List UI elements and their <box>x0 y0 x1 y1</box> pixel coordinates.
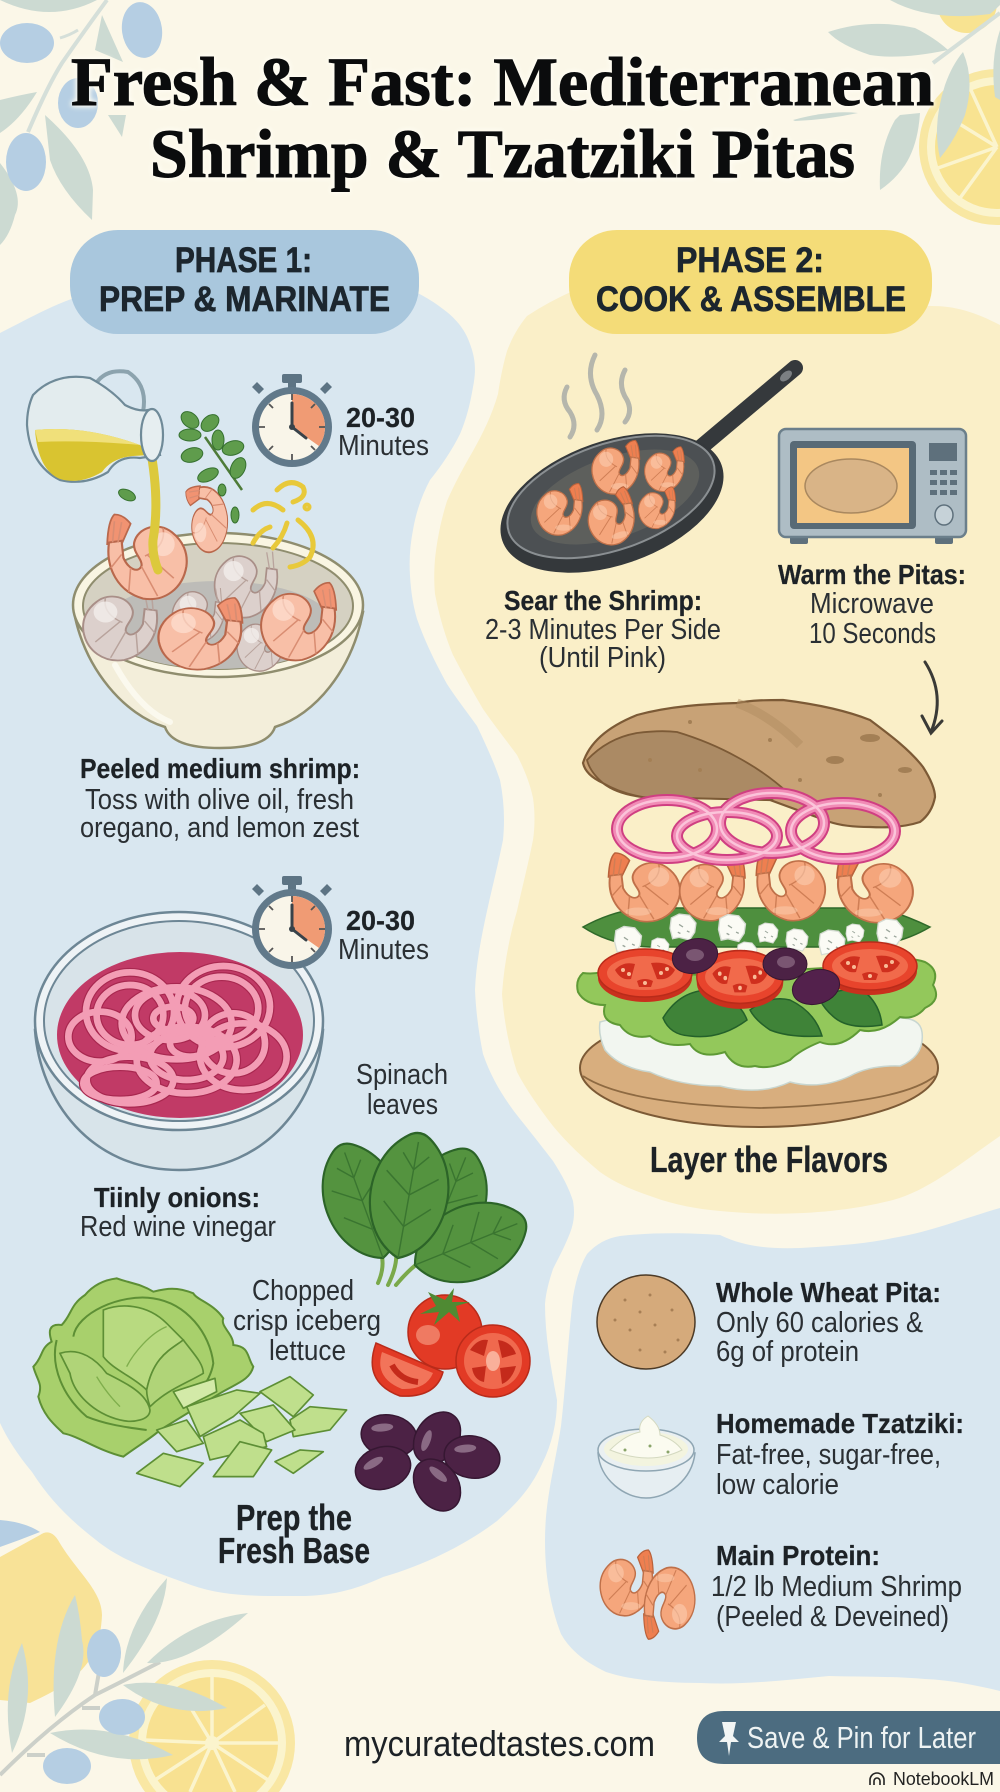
text: main protein: Main Protein: <box>716 1540 880 1571</box>
feta crumbles <box>614 914 903 962</box>
olive slices <box>668 934 844 1010</box>
text: shrimp marinade <box>80 753 360 844</box>
text: prep the fresh base <box>218 1497 370 1571</box>
text: whole wheat pita: Whole Wheat Pita: <box>716 1277 941 1308</box>
heading: phase 1 pill: PHASE 1: <box>175 241 312 280</box>
text: homemade tzatziki: low calorie <box>716 1469 839 1501</box>
icon: lemon zest curls <box>253 483 313 567</box>
text: spinach label: leaves <box>367 1089 438 1121</box>
icon: tzatziki bowl <box>598 1416 695 1498</box>
heading: phase 1 pill: PREP & MARINATE <box>99 280 390 319</box>
decoration: top-left olive branch <box>0 0 166 245</box>
text: sear the shrimp: 2-3 Minutes Per Side <box>485 614 721 646</box>
panel: phase 2 background blob <box>434 290 1000 1214</box>
tzatziki layer <box>600 1015 922 1090</box>
text: lettuce label <box>233 1275 381 1367</box>
bottom pita <box>580 1009 938 1127</box>
shrimp layer <box>608 851 913 923</box>
icon: kalamata olives <box>351 1403 503 1520</box>
text: warm the pitas: Microwave <box>810 588 934 620</box>
text: main protein: 1/2 lb Medium Shrimp <box>711 1571 962 1603</box>
text: warm the pitas <box>778 559 966 650</box>
timer 1 text: 20-30 <box>346 402 415 433</box>
text: sear the shrimp: (Until Pink) <box>539 642 666 674</box>
text: main protein: (Peeled & Deveined) <box>716 1601 949 1633</box>
icon: shrimp bowl <box>73 486 363 748</box>
text: whole wheat pita: 6g of protein <box>716 1336 859 1368</box>
icon: tomatoes <box>372 1288 530 1397</box>
text: onion label: Tiinly onions: <box>94 1182 260 1213</box>
text: main protein <box>711 1540 962 1633</box>
text: homemade tzatziki: Homemade Tzatziki: <box>716 1408 964 1439</box>
heading: phase 1 pill <box>70 230 419 334</box>
top pita <box>583 700 935 827</box>
text: prep the fresh base: Prep the <box>236 1497 352 1538</box>
green layer <box>583 908 930 947</box>
text: lettuce label: Chopped <box>252 1275 354 1307</box>
title: Shrimp & Tzatziki Pitas <box>150 116 855 192</box>
timer 1 <box>252 374 332 467</box>
icon: layered pita sandwich <box>577 700 938 1127</box>
text: homemade tzatziki: Fat-free, sugar-free, <box>716 1439 941 1471</box>
lettuce layer <box>577 959 936 1067</box>
text: warm the pitas: Warm the Pitas: <box>778 559 966 590</box>
text: shrimp marinade: Toss with olive oil, fresh <box>85 784 354 816</box>
text: spinach label <box>356 1059 448 1121</box>
icon: onion bowl <box>35 912 323 1170</box>
timer 1 text: Minutes <box>338 430 429 462</box>
text: homemade tzatziki <box>716 1408 964 1501</box>
red onion rings <box>617 793 895 860</box>
text: lettuce label: lettuce <box>269 1335 346 1367</box>
text: sear the shrimp: Sear the Shrimp: <box>504 585 702 616</box>
icon: microwave with pita <box>779 429 966 544</box>
timer 2 <box>252 876 332 969</box>
text: lettuce label: crisp iceberg <box>233 1305 381 1337</box>
text: warm the pitas: 10 Seconds <box>809 618 936 650</box>
icon: spinach leaves <box>307 1127 539 1299</box>
icon: iceberg lettuce <box>33 1278 347 1487</box>
arrow: warm pitas to sandwich <box>922 662 942 733</box>
text: shrimp marinade: Peeled medium shrimp: <box>80 753 360 784</box>
icon: olive oil pitcher and stream <box>27 371 163 570</box>
text: shrimp marinade: oregano, and lemon zest <box>80 812 359 844</box>
decoration: bottom-left lemon and olive branch <box>0 1520 295 1792</box>
text: website: mycuratedtastes.com <box>344 1723 655 1764</box>
watermark: NotebookLM: NotebookLM <box>893 1769 994 1789</box>
icon: steam <box>564 355 630 437</box>
text: whole wheat pita <box>716 1277 941 1368</box>
text: onion label <box>80 1182 276 1243</box>
icon: oregano sprig <box>117 408 249 523</box>
icon: whole wheat pita <box>597 1275 695 1369</box>
heading: phase 2 pill <box>569 230 932 334</box>
spinach in sandwich <box>663 990 882 1037</box>
timer 1 text <box>338 402 429 462</box>
heading: phase 2 pill: COOK & ASSEMBLE <box>596 280 906 319</box>
text: prep the fresh base: Fresh Base <box>218 1530 370 1571</box>
timer 2 text: 20-30 <box>346 905 415 936</box>
tomato slices <box>598 942 917 1009</box>
text: onion label: Red wine vinegar <box>80 1211 276 1243</box>
timer 2 text: Minutes <box>338 934 429 966</box>
text: spinach label: Spinach <box>356 1059 448 1091</box>
panel: nutrition background blob <box>545 1208 1000 1691</box>
panel: phase 1 background blob <box>0 285 574 1596</box>
text: layer the flavors: Layer the Flavors <box>650 1139 888 1180</box>
text: sear the shrimp <box>485 585 721 674</box>
title <box>71 44 934 192</box>
icon: shrimp pair <box>600 1550 695 1639</box>
title: Fresh & Fast: Mediterranean <box>71 44 934 120</box>
icon: skillet with shrimp <box>482 368 795 599</box>
text: whole wheat pita: Only 60 calories & <box>716 1307 923 1339</box>
decoration: top-right lemon and leaves <box>793 0 1000 225</box>
footer pill: save and pin <box>697 1711 1000 1764</box>
heading: phase 2 pill: PHASE 2: <box>676 241 824 280</box>
timer 2 text <box>338 905 429 966</box>
